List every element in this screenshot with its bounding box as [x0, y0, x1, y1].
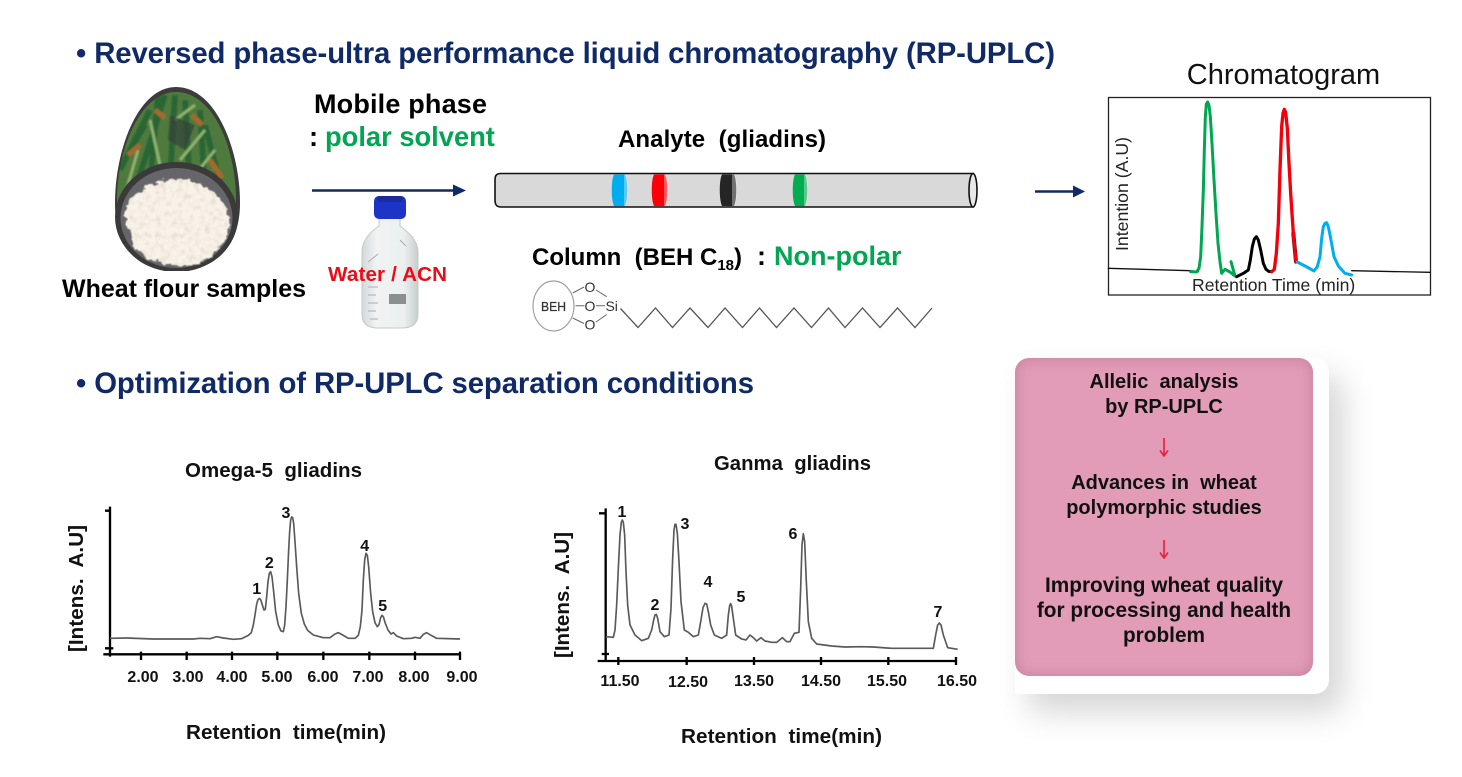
x axis tick labels	[600, 673, 977, 691]
x axis tick labels: 4.00	[216, 669, 248, 686]
C18 molecule structure: O	[585, 298, 596, 314]
band: red	[652, 174, 667, 206]
band: blue	[612, 174, 627, 206]
label: analyte: Analyte (gliadins)	[618, 126, 826, 153]
x axis tick labels: 16.50	[937, 673, 977, 690]
x axis tick labels: 7.00	[352, 669, 384, 686]
text: advances in wheat polymorphic studies: Advances in wheat polymorphic studies	[1066, 472, 1262, 519]
x axis tick labels: 12.50	[668, 674, 708, 691]
label: column BEH C18: 18	[717, 257, 734, 274]
band: green	[793, 174, 807, 206]
C18 molecule structure: O	[585, 279, 596, 295]
x axis tick labels: 11.50	[600, 673, 640, 690]
peak labels: 5	[378, 598, 387, 615]
column tube with analyte bands	[495, 174, 977, 207]
icon: wheat field and flour sample	[115, 87, 240, 271]
x axis tick labels: 5.00	[261, 669, 293, 686]
axis label: retention time: Retention Time (min)	[1192, 275, 1355, 295]
arrow: mobile phase flow	[312, 184, 466, 196]
chart: ganma gliadins chromatogram	[598, 504, 977, 691]
peak labels: 6	[789, 526, 798, 543]
peak labels: 7	[934, 604, 943, 621]
peak labels: 5	[737, 589, 746, 606]
x axis tick labels: 8.00	[398, 669, 430, 686]
peak labels: 4	[704, 574, 713, 591]
peak labels	[618, 504, 943, 621]
x axis tick labels: 6.00	[307, 669, 339, 686]
title: chromatogram: Chromatogram	[1187, 59, 1380, 91]
x axis tick labels: 13.50	[734, 673, 774, 690]
axis label: ganma intensity: [Intens. A.U]	[551, 532, 574, 658]
arrow: to chromatogram	[1035, 186, 1085, 198]
label: non-polar: Non-polar	[774, 241, 902, 271]
peak labels: 1	[252, 581, 261, 598]
peak labels: 4	[360, 538, 369, 555]
axis label: omega intensity: [Intens. A.U]	[65, 525, 88, 652]
band: black	[720, 174, 736, 206]
text: improving wheat quality: Improving wheat quality for processing and health problem	[1037, 574, 1291, 647]
C18 molecule structure: BEH	[541, 299, 566, 314]
chart title: ganma gliadins: Ganma gliadins	[714, 453, 871, 475]
peak labels: 1	[618, 504, 627, 521]
chart: schematic chromatogram	[1108, 98, 1430, 295]
C18 molecule structure: O	[585, 316, 596, 332]
label: wheat flour samples: Wheat flour samples	[62, 275, 306, 303]
x axis tick labels: 14.50	[801, 673, 841, 690]
x axis tick labels	[127, 669, 478, 686]
label: polar solvent: :	[309, 121, 318, 152]
x axis tick labels: 3.00	[172, 669, 204, 686]
label: mobile phase: Mobile phase	[314, 89, 487, 119]
chart: omega-5 gliadins chromatogram	[103, 505, 478, 686]
heading: optimization: • Optimization of RP-UPLC separation conditions	[76, 367, 754, 400]
x axis tick labels: 15.50	[867, 673, 907, 690]
text: allelic analysis: Allelic analysis by RP-UPLC	[1090, 371, 1238, 418]
label: polar solvent: polar solvent	[325, 121, 495, 152]
icon: solvent bottle	[362, 196, 418, 328]
arrow: second down arrow	[1160, 540, 1168, 559]
chart title: omega-5 gliadins: Omega-5 gliadins	[185, 459, 362, 482]
peak labels	[252, 505, 387, 615]
peak labels: 2	[651, 597, 660, 614]
callout: allelic analysis summary	[1015, 358, 1313, 676]
peak labels: 3	[282, 505, 291, 522]
label: column BEH C18: )	[734, 244, 742, 271]
C18 molecule structure	[533, 279, 932, 332]
axis label: ganma retention time: Retention time(min)	[681, 725, 882, 748]
peak labels: 3	[681, 516, 690, 533]
label: non-polar: :	[757, 241, 766, 271]
heading: reversed phase UPLC: • Reversed phase-ultra performance liquid chromatography (RP-UPLC)	[76, 37, 1055, 70]
peak labels: 2	[265, 555, 274, 572]
C18 molecule structure: Si	[605, 298, 618, 314]
label: column BEH C18: Column (BEH C	[532, 244, 717, 271]
x axis tick labels: 2.00	[127, 669, 159, 686]
x axis tick labels: 9.00	[446, 669, 478, 686]
axis label: omega retention time: Retention time(min)	[186, 721, 386, 744]
axis label: intention: Intention (A.U)	[1112, 137, 1132, 251]
label: water / ACN: Water / ACN	[328, 263, 447, 286]
arrow: first down arrow	[1160, 438, 1168, 457]
white card behind callout	[1015, 358, 1329, 694]
